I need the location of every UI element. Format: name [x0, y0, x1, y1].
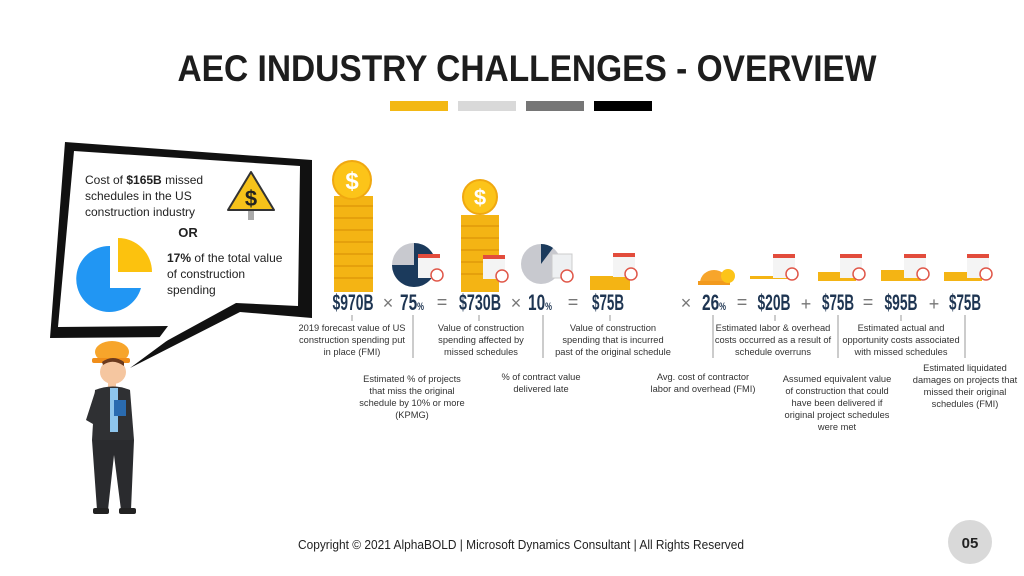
label: 20B: Estimated labor & overhead: [716, 323, 830, 333]
icon: pie chart: [76, 238, 152, 312]
icon: warning dollar sign: [228, 172, 274, 220]
label: 970B: 2019 forecast value of US: [299, 323, 405, 333]
footer: Copyright © 2021 AlphaBOLD | Microsoft Dynamics Consultant | All Rights Reserved: [298, 538, 744, 552]
speech bubble: [50, 142, 312, 368]
icon: 75% pie with calendar: [392, 243, 443, 287]
equation row: $75B: [949, 290, 981, 315]
equation row: 26%: [702, 290, 726, 315]
equation row: $95B: [884, 290, 918, 315]
label: 730B: spending affected by: [438, 335, 524, 345]
equation row: $970B: [332, 290, 374, 315]
label: 730B: missed schedules: [444, 347, 518, 357]
icon: warning dollar sign: $: [245, 186, 257, 211]
page number: [948, 520, 992, 564]
equation row: ×: [681, 293, 691, 313]
stack: $730B coins with calendar: $: [474, 185, 486, 210]
icon: $75B calendar: [818, 254, 865, 281]
icon: $20B calendar: [750, 254, 798, 280]
label: 75B equivalent: have been delivered if: [792, 398, 883, 408]
label: 75B liquidated: Estimated liquidated: [923, 363, 1007, 373]
equation row: +: [929, 294, 939, 314]
label: 75B: spending that is incurred: [562, 335, 664, 345]
bubble text: cost: Cost of $165B missed: [85, 173, 203, 187]
label: 75B: past of the original schedule: [555, 347, 671, 357]
label: 26%: labor and overhead (FMI): [651, 384, 755, 394]
label: 75B equivalent: original project schedules: [785, 410, 890, 420]
equation row: $75B: [592, 290, 624, 315]
label: 20B: schedule overruns: [735, 347, 811, 357]
label: 95B: Estimated actual and: [858, 323, 944, 333]
equation row: $75B: [822, 290, 854, 315]
stack: $970B coins: $: [345, 168, 359, 195]
page number: 05: [962, 535, 978, 552]
color bars: [390, 101, 652, 111]
label: 95B: with missed schedules: [853, 347, 948, 357]
label: 75B liquidated: missed their original: [924, 387, 1006, 397]
label: 970B: in place (FMI): [324, 347, 380, 357]
label: 75B equivalent: were met: [817, 422, 857, 432]
bubble text: percent: of construction: [167, 267, 245, 281]
bubble text: percent: 17% of the total value: [167, 251, 282, 265]
label: 10%: % of contract value: [501, 372, 581, 382]
equation row: 10%: [528, 290, 552, 315]
icon: $95B calendar: [881, 254, 929, 281]
label: 75%: that miss the original: [369, 386, 455, 396]
icon: $75B small coins with calendar: [590, 253, 637, 290]
label: 75B equivalent: Assumed equivalent value: [783, 374, 891, 384]
equation row: $20B: [758, 290, 790, 315]
stack: $730B coins with calendar: [461, 180, 508, 292]
equation row: =: [737, 292, 747, 312]
equation row: ×: [511, 293, 521, 313]
equation row: $730B: [459, 290, 501, 315]
bubble text: OR: OR: [178, 225, 198, 240]
person: engineer: [86, 341, 136, 514]
label: 20B: costs occurred as a result of: [715, 335, 832, 345]
connector lines: [352, 315, 965, 358]
equation row: 75%: [400, 290, 424, 315]
equation row: [332, 290, 981, 315]
label: 75B equivalent: of construction that could: [785, 386, 889, 396]
label: 95B: opportunity costs associated: [842, 335, 960, 345]
bubble text: cost: construction industry: [85, 205, 195, 219]
label: 75B liquidated: damages on projects that: [913, 375, 1018, 385]
icon: hard hat with coin: [698, 269, 735, 285]
label: 26%: Avg. cost of contractor: [657, 372, 749, 382]
label: 75%: (KPMG): [395, 410, 429, 420]
equation row: +: [801, 294, 811, 314]
bubble text: percent: spending: [167, 283, 216, 297]
label: 75B liquidated: schedules (FMI): [932, 399, 998, 409]
icon: $75B liquidated calendar: [944, 254, 992, 281]
equation row: ×: [383, 293, 393, 313]
label: 75B: Value of construction: [570, 323, 656, 333]
label: 75%: Estimated % of projects: [363, 374, 461, 384]
label: 730B: Value of construction: [438, 323, 524, 333]
equation row: =: [863, 292, 873, 312]
label: 75%: schedule by 10% or more: [359, 398, 465, 408]
equation row: =: [568, 292, 578, 312]
stack: $970B coins: [333, 161, 373, 292]
label: 10%: delivered late: [513, 384, 569, 394]
bubble text: cost: schedules in the US: [85, 189, 192, 203]
icon: 10% pie with document: [521, 244, 573, 284]
equation row: =: [437, 292, 447, 312]
label: 970B: construction spending put: [299, 335, 405, 345]
title: AEC INDUSTRY CHALLENGES - OVERVIEW: [178, 48, 877, 89]
